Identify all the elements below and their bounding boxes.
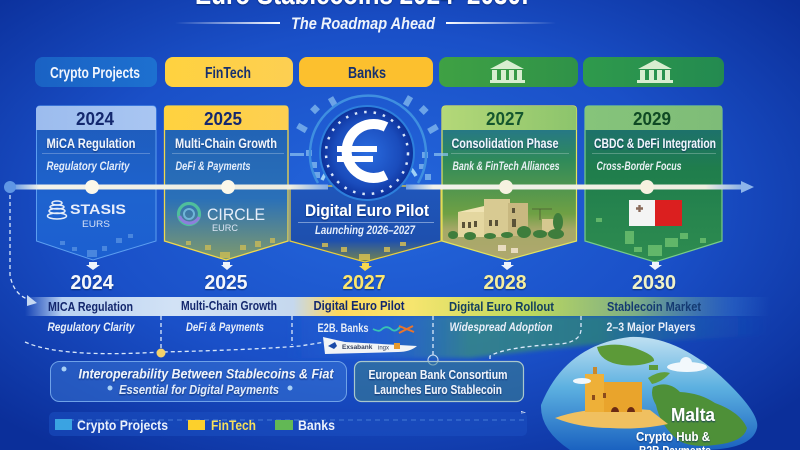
legend: banks: Banks xyxy=(298,417,335,433)
clouds xyxy=(573,357,707,384)
milestone band: MICA Regulation xyxy=(48,299,133,314)
callout: interoperability: Interoperability Between Stablecoins & Fiat xyxy=(78,366,335,382)
milestone details: E2B. Banks xyxy=(318,321,369,335)
panel: 2025: DeFi & Payments xyxy=(176,161,250,173)
subtitle: The Roadmap Ahead xyxy=(291,15,436,33)
icon: digital euro coin xyxy=(290,95,448,200)
panel: 2029 xyxy=(585,106,722,262)
pill: Banks xyxy=(299,57,433,87)
connector markers xyxy=(27,295,526,414)
milestone band xyxy=(25,297,770,358)
lower timeline years: 2028 xyxy=(484,272,526,294)
panel: 2024 xyxy=(36,106,156,260)
callout: interoperability: Essential for Digital Payments xyxy=(119,382,279,397)
pill: Crypto Projects xyxy=(35,57,157,87)
illustration: Malta island: Crypto Hub & xyxy=(636,429,710,444)
pill: bank icon green 2 xyxy=(583,57,724,87)
lower timeline years: 2030 xyxy=(632,272,676,294)
panel: 2024: MiCA Regulation xyxy=(46,136,136,151)
lower timeline years: 2027 xyxy=(342,272,386,294)
pill: FinTech: FinTech xyxy=(205,65,251,82)
logo: STASIS EURS: EURS xyxy=(82,219,110,230)
logo: Circle EURC xyxy=(178,204,265,234)
logo: STASIS EURS xyxy=(48,201,126,230)
timeline arrow xyxy=(4,180,754,194)
milestone details: DeFi & Payments xyxy=(186,320,264,334)
bank logos banner xyxy=(323,326,417,354)
legend: crypto projects: Crypto Projects xyxy=(77,417,168,433)
callout: European bank consortium xyxy=(354,362,524,402)
panel: Digital Euro Pilot: Launching 2026–2027 xyxy=(315,225,415,237)
legend: fintech: FinTech xyxy=(211,417,256,433)
panel: 2025: 2025 xyxy=(204,109,242,129)
panel: 2024: Regulatory Clarity xyxy=(46,161,130,173)
pill: Banks: Banks xyxy=(348,65,386,82)
panel: 2027: Bank & FinTech Alliances xyxy=(452,161,560,173)
callout: interoperability xyxy=(50,362,346,402)
panel: 2024: 2024 xyxy=(76,109,114,129)
panel: 2025 xyxy=(164,106,288,260)
legend: banks xyxy=(275,417,335,433)
logo: Circle EURC: CIRCLE xyxy=(207,206,265,224)
fort xyxy=(555,367,668,428)
milestone details: Regulatory Clarity xyxy=(48,320,136,334)
panel: 2027 xyxy=(442,106,576,260)
pill: bank icon green 1 xyxy=(439,57,578,87)
milestone band: Multi-Chain Growth xyxy=(181,298,277,313)
callout: European bank consortium: European Bank Consortium xyxy=(368,367,508,382)
milestone details: Widespread Adoption xyxy=(450,320,552,334)
pill: FinTech xyxy=(165,57,293,87)
lower timeline years xyxy=(70,272,676,294)
pill: Crypto Projects: Crypto Projects xyxy=(50,65,140,82)
milestone band: Digital Euro Pilot xyxy=(314,298,405,313)
legend xyxy=(49,412,527,436)
illustration: Malta island xyxy=(541,337,757,450)
logo: STASIS EURS: STASIS xyxy=(70,202,126,217)
panel: Digital Euro Pilot: Digital Euro Pilot xyxy=(305,201,429,220)
panel: 2029: 2029 xyxy=(633,109,671,129)
illustration: Maltese building xyxy=(448,199,564,253)
dashed connectors xyxy=(10,195,581,420)
panel: 2025: Multi-Chain Growth xyxy=(175,136,277,151)
callout: European bank consortium: Launches Euro Stablecoin xyxy=(374,382,502,397)
panel: 2029: Cross-Border Focus xyxy=(596,161,682,173)
milestone details xyxy=(48,320,696,335)
milestone band: Stablecoin Market xyxy=(607,299,702,314)
milestone details: 2–3 Major Players xyxy=(606,320,696,334)
islands xyxy=(597,345,747,446)
panel: 2029: CBDC & DeFi Integration xyxy=(594,136,716,151)
panel: 2027: 2027 xyxy=(486,109,524,129)
lower timeline years: 2024 xyxy=(70,272,114,294)
bank logos banner: ingx xyxy=(378,346,389,352)
milestone band: Digital Euro Rollout xyxy=(449,299,555,314)
bank logos banner: Exsabank xyxy=(342,344,373,351)
panel: 2027: Consolidation Phase xyxy=(452,136,559,151)
logo: Circle EURC: EURC xyxy=(212,223,238,234)
panel pointer arrows xyxy=(86,262,662,271)
lower timeline years: 2025 xyxy=(204,272,248,294)
illustration: Malta island: Malta xyxy=(671,405,716,425)
panel: Digital Euro Pilot xyxy=(290,186,441,262)
legend: fintech xyxy=(188,417,256,433)
icon: Malta flag xyxy=(629,200,682,226)
